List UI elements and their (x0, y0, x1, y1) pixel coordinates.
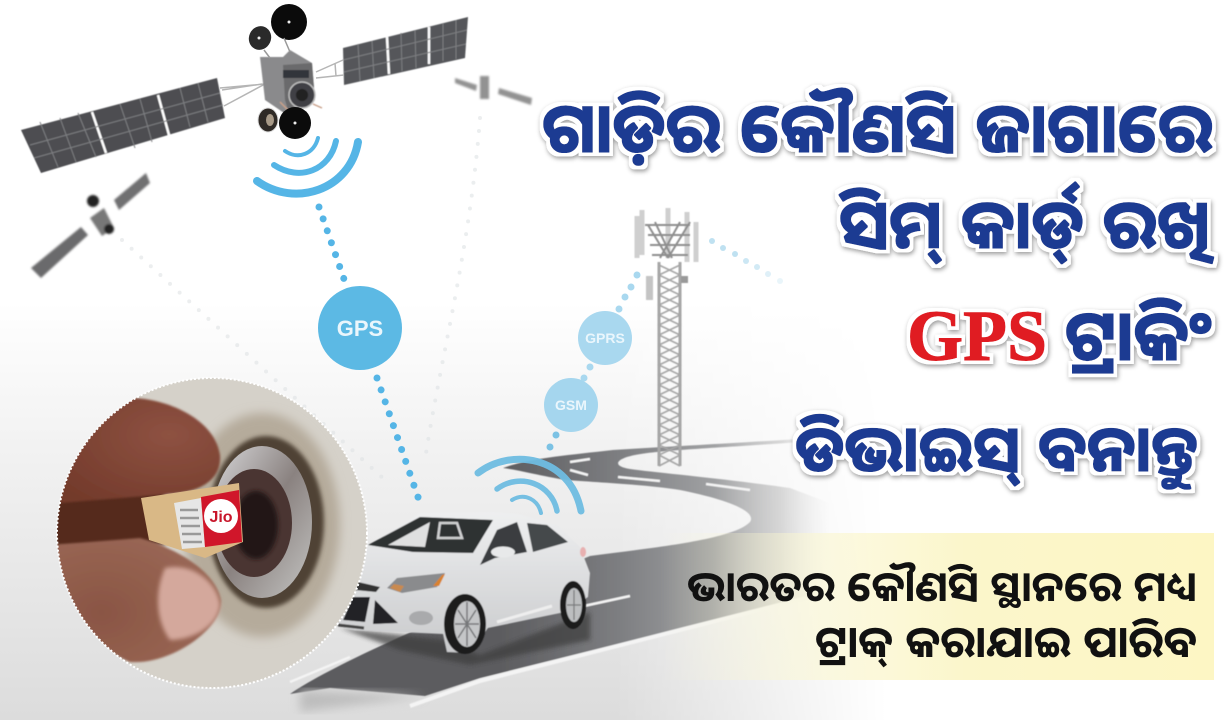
dotted link: tower to car (546, 272, 640, 450)
windshield (368, 517, 493, 553)
subtitle band (660, 533, 1214, 680)
title line 3: GPS (907, 296, 1047, 376)
wifi arcs: car (478, 459, 581, 513)
satellite: small left (31, 173, 150, 278)
cell tower (637, 208, 696, 466)
tail light (580, 547, 586, 557)
index finger (50, 398, 220, 503)
title line 4: ଡିଭାଇସ୍ ବନାନ୍ତୁ (795, 413, 1198, 490)
road (290, 439, 835, 712)
headlight (387, 573, 445, 593)
thumb (50, 538, 221, 662)
door sill (497, 606, 552, 622)
subtitle line 2: ଟ୍ରାକ୍ କରାଯାଇ ପାରିବ (815, 617, 1197, 668)
satellite: small right (455, 76, 532, 105)
satellite: main (21, 4, 468, 173)
car (337, 512, 590, 665)
thumb nail (158, 567, 220, 640)
SIM photo circle (50, 378, 367, 688)
finger gap (50, 488, 165, 548)
SIM card (141, 483, 243, 558)
SIM card: Jio (209, 509, 233, 526)
title line 2: ସିମ୍ କାର୍ଡ୍ ରଖି (838, 181, 1214, 265)
grille (355, 582, 380, 592)
left solar panel (21, 78, 225, 173)
side windows (480, 522, 527, 565)
title line 1: ଗାଡ଼ିର କୌଣସି ଜାଗାରେ (542, 88, 1213, 167)
dotted link: tower to right (709, 238, 783, 284)
GSM badge (544, 378, 598, 432)
struts (220, 60, 344, 106)
wifi arcs: satellite (257, 138, 358, 194)
dishes (245, 4, 311, 139)
right solar panel (343, 17, 468, 85)
GPRS badge (578, 311, 632, 365)
SIM photo border (57, 378, 367, 688)
title line 3: ଟ୍ରାକିଂ (1065, 297, 1212, 375)
GPRS badge: GPRS (585, 330, 625, 346)
GPS badge: GPS (337, 316, 383, 341)
body (260, 50, 322, 117)
subtitle line 1: ଭାରତର କୌଣସି ସ୍ଥାନରେ ମଧ୍ୟ (687, 562, 1197, 610)
GSM badge: GSM (555, 397, 587, 413)
wheels (444, 594, 486, 654)
faint signal lines (122, 118, 480, 480)
background gradient (0, 392, 822, 720)
GPS badge (318, 286, 402, 370)
dotted link: satellite to GPS and car (319, 207, 419, 500)
